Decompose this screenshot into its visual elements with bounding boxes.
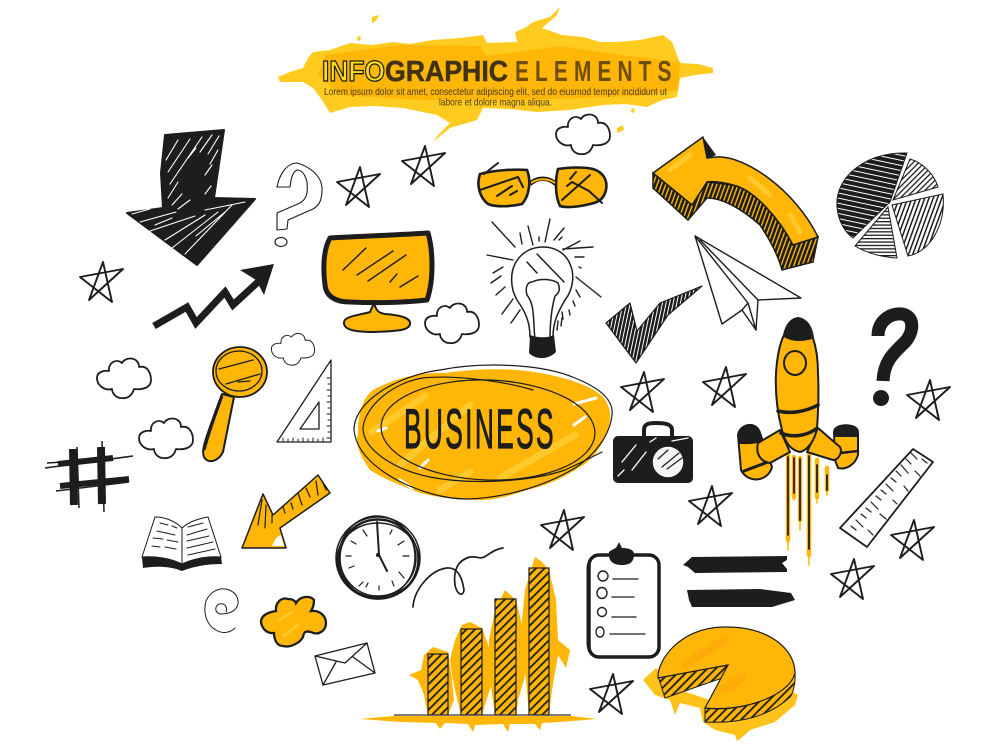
icon: set square: [277, 360, 331, 442]
clock hands: [377, 522, 387, 571]
right booster: [834, 425, 858, 468]
magnifier head: [213, 347, 267, 397]
arrow head notch: [703, 137, 716, 159]
rocket flames: [788, 455, 827, 565]
icon: glasses: [478, 163, 606, 207]
arrow light texture: [670, 155, 800, 232]
pie texture: [685, 640, 742, 690]
icon: check mark: [606, 286, 702, 363]
checklist rows: [596, 571, 645, 637]
right wing: [807, 428, 841, 460]
icon: ruler: [840, 449, 933, 547]
pie wedge hatch: [658, 665, 728, 698]
pie slice bottom: [855, 207, 897, 258]
BUSINESS label: BUSINESS: [404, 398, 556, 461]
heading word INFO: INFO: [322, 56, 385, 88]
camera lens: [652, 446, 684, 478]
icon: light bulb: [487, 219, 601, 358]
icon: black text bars: [683, 556, 795, 607]
bulb outline: [512, 247, 573, 337]
icon: yellow monitor: [324, 233, 432, 332]
rocket window: [784, 351, 806, 375]
chart baseline: [394, 714, 571, 716]
heading word GRAPHIC: GRAPHIC: [385, 56, 508, 88]
left lens: [478, 170, 529, 206]
icon: rocket: [738, 318, 858, 565]
icon: envelope: [315, 643, 375, 685]
camera body: [613, 436, 693, 483]
subtitle text line one: Lorem ipsum dolor sit amet, consectetur adipiscing elit, sed do eiusmod tempor incididunt ut: [324, 86, 667, 98]
bar 1: [428, 654, 448, 715]
icon: black question mark: [873, 314, 912, 406]
clipboard board: [589, 555, 659, 657]
subtitle text line two: labore et dolore magna aliqua.: [439, 96, 552, 108]
arrow hatched underside: [653, 173, 818, 270]
icon: paper plane: [695, 236, 801, 330]
left booster: [738, 425, 772, 479]
pie top face: [658, 627, 795, 709]
icon: magnifying glass: [203, 347, 267, 461]
yellow splashes behind bars: [409, 557, 570, 715]
icon: black scribbled down arrow: [127, 130, 255, 265]
icon: yellow 3D curved arrow: [653, 137, 818, 270]
icon: rising zigzag arrow: [154, 264, 274, 326]
icon: camera: [613, 423, 693, 483]
arrow top face: [653, 137, 818, 245]
bar chart: [360, 557, 597, 732]
callout: business oval: [354, 365, 612, 500]
icon: at sign: [205, 589, 238, 632]
middle oval ring: [363, 377, 602, 481]
icon: wall clock: [336, 516, 420, 599]
monitor screen: [324, 233, 432, 303]
heading word ELEMENTS: ELEMENTS: [515, 56, 678, 88]
icon: outline question mark: [275, 163, 322, 246]
outer oval ring: [354, 365, 612, 499]
lens reflections: [480, 163, 602, 203]
title banner: [278, 7, 713, 142]
clock ticks: [346, 530, 409, 590]
clipboard clip: [609, 542, 634, 565]
rocket bands: [778, 405, 818, 436]
texture strokes: [372, 396, 575, 490]
screen glare lines: [343, 248, 418, 287]
icon: outline clouds: [97, 114, 610, 458]
pie splash: [643, 668, 798, 741]
icon: yellow cloud: [261, 597, 326, 646]
icon: stars: [80, 146, 950, 714]
rocket nose: [784, 318, 812, 341]
camera handle: [644, 423, 672, 440]
icon: 3D yellow pie chart: [643, 627, 798, 741]
monitor stand: [344, 303, 410, 332]
pie slice top right: [893, 159, 938, 200]
bulb rays: [487, 219, 601, 330]
pie bottom hatch: [705, 673, 795, 722]
yellow splash behind title: [278, 7, 713, 142]
inner oval ring: [379, 376, 597, 484]
rocket body: [776, 318, 818, 452]
small splash droplets: [357, 15, 635, 133]
yellow base smear: [360, 716, 597, 732]
magnifier handle: [203, 394, 234, 461]
pie slice right: [892, 194, 943, 256]
clock rings: [336, 516, 420, 599]
icon: hatched pie chart: [837, 153, 943, 258]
darker splash layer: [318, 45, 680, 100]
icon: hash symbol: [45, 441, 133, 512]
icon: open book: [142, 517, 222, 571]
left wing: [757, 430, 790, 463]
bar 2: [461, 629, 482, 715]
yellow blob: [357, 369, 610, 500]
icon: clipboard checklist: [587, 542, 660, 657]
bulb socket: [529, 335, 556, 358]
icon: squiggle line: [413, 548, 503, 607]
bar 3: [495, 599, 516, 715]
pie slice large: [837, 153, 907, 238]
right lens: [556, 168, 606, 207]
glasses bridge: [530, 179, 556, 184]
icon: yellow arrow pointing down left: [242, 475, 330, 548]
bar 4: [529, 568, 549, 715]
bulb filament: [526, 254, 564, 340]
